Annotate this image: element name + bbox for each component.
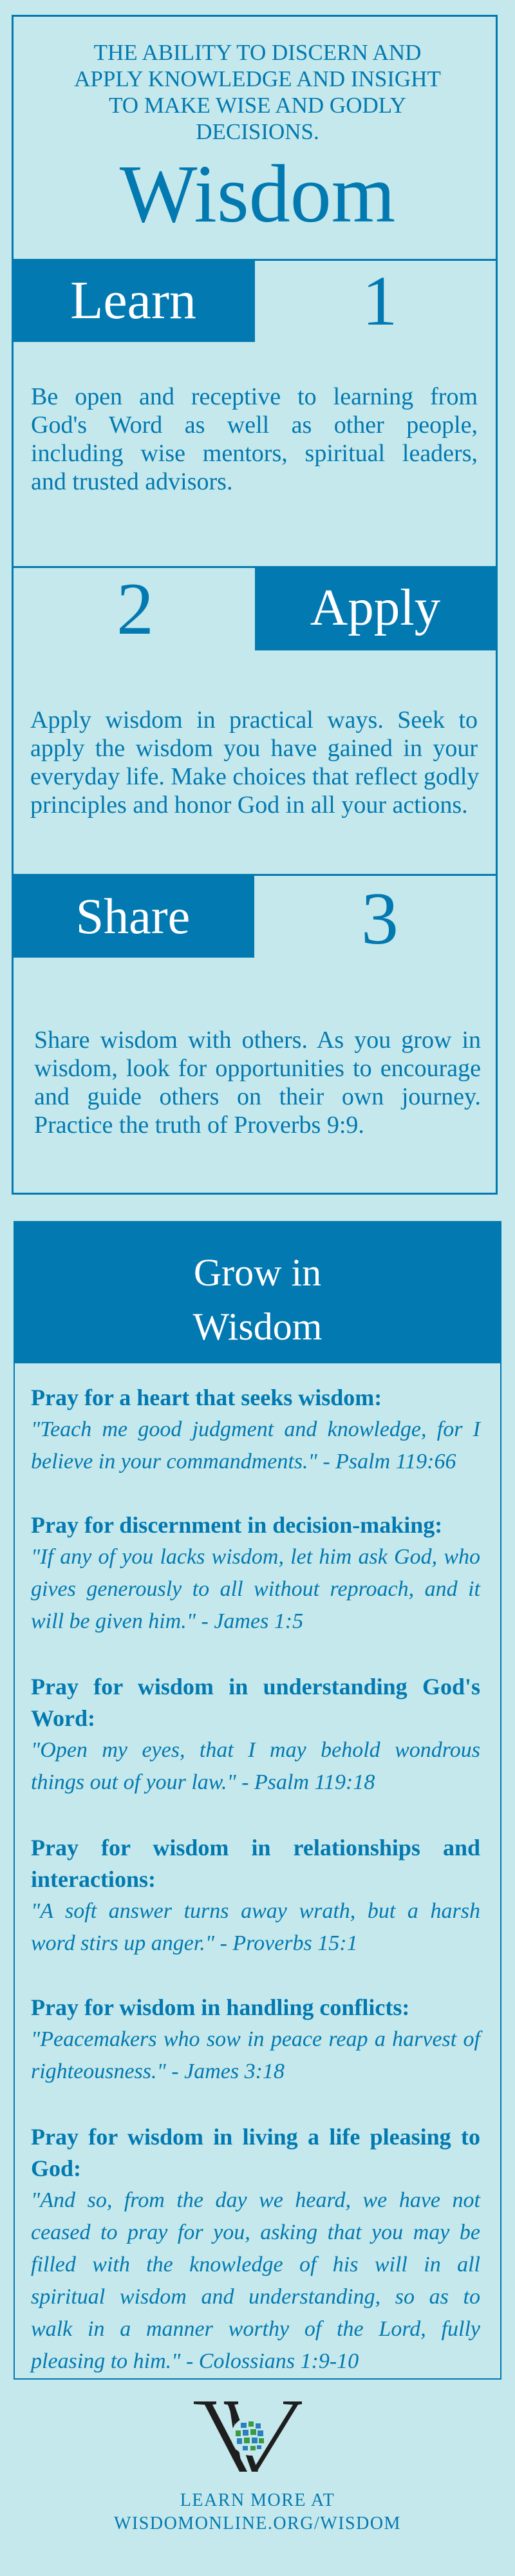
step 2 text: principles and honor God in all your actions. — [30, 791, 468, 819]
icon: logo W with globe — [194, 2401, 302, 2472]
prayer 4: word stirs up anger." - Proverbs 15:1 — [31, 1931, 358, 1955]
step 1 label box: Learn — [70, 270, 196, 330]
panel header: Grow in — [194, 1251, 321, 1294]
main frame — [12, 15, 498, 1195]
prayer 2: will be given him." - James 1:5 — [31, 1609, 303, 1633]
divider — [12, 874, 496, 876]
step 1 text: Be open and receptive to learning from — [31, 383, 478, 410]
step 2 text — [30, 706, 479, 819]
footer text: WISDOMONLINE.ORG/WISDOM — [114, 2514, 401, 2533]
prayer 3: things out of your law." - Psalm 119:18 — [31, 1770, 375, 1794]
prayer 6: walk in a manner worthy of the Lord, fully — [31, 2317, 480, 2341]
step 3 text: Practice the truth of Proverbs 9:9. — [34, 1112, 364, 1139]
step 3 text: Share wisdom with others. As you grow in — [34, 1027, 481, 1054]
step 3 text: wisdom, look for opportunities to encourage — [34, 1055, 481, 1082]
step 1 text — [31, 383, 478, 495]
subtitle: THE ABILITY TO DISCERN AND — [94, 40, 421, 65]
step 3 text — [34, 1027, 481, 1139]
step 3 text: and guide others on their own journey. — [34, 1083, 481, 1110]
step 2 text: apply the wisdom you have gained in your — [30, 735, 478, 762]
panel header — [14, 1221, 501, 1363]
title: Wisdom — [120, 148, 395, 240]
step 3 number: 3 — [361, 878, 398, 960]
step 1 text: including wise mentors, spiritual leaders, — [31, 440, 478, 467]
prayer 6: ceased to pray for you, asking that you may be — [31, 2221, 480, 2244]
prayer 5: "Peacemakers who sow in peace reap a harvest of — [31, 2027, 480, 2051]
step 1 number: 1 — [362, 261, 398, 340]
prayer 4: Pray for wisdom in relationships and — [31, 1835, 480, 1861]
footer text — [114, 2490, 401, 2533]
prayer 6: "And so, from the day we heard, we have not — [31, 2188, 480, 2212]
step 2 text: Apply wisdom in practical ways. Seek to — [30, 706, 478, 734]
step 1 text: and trusted advisors. — [31, 468, 232, 495]
subtitle: DECISIONS. — [196, 119, 319, 144]
prayer 3: "Open my eyes, that I may behold wondrous — [31, 1738, 480, 1762]
prayer 6: pleasing to him." - Colossians 1:9-10 — [31, 2349, 359, 2373]
prayer 1: believe in your commandments." - Psalm 119:66 — [31, 1450, 456, 1473]
prayer 6: spiritual wisdom and understanding, so as to — [31, 2285, 480, 2309]
prayer 5: Pray for wisdom in handling conflicts: — [31, 1994, 409, 2020]
step 2 label box: Apply — [310, 578, 440, 636]
step 1 text: God's Word as well as other people, — [31, 412, 478, 439]
prayer 4: interactions: — [31, 1866, 156, 1892]
subtitle — [74, 40, 441, 144]
step 1 label box — [12, 260, 255, 342]
prayer 6: God: — [31, 2155, 81, 2181]
prayer 4: "A soft answer turns away wrath, but a harsh — [31, 1899, 480, 1923]
prayer 6: Pray for wisdom in living a life pleasing to — [31, 2124, 480, 2150]
step 2 text: everyday life. Make choices that reflect godly — [30, 763, 479, 790]
step 3 label box: Share — [76, 888, 190, 944]
prayer 3: Word: — [31, 1705, 95, 1731]
subtitle: TO MAKE WISE AND GODLY — [109, 93, 406, 118]
prayer 2 — [31, 1512, 481, 1633]
footer text: LEARN MORE AT — [180, 2490, 335, 2510]
prayer 3 — [31, 1674, 480, 1794]
step 3 label box — [12, 875, 254, 958]
prayer 2: gives generously to all without reproach, and it — [31, 1577, 480, 1601]
panel: grow in wisdom — [14, 1221, 501, 2380]
prayer 2: "If any of you lacks wisdom, let him ask God, who — [31, 1545, 480, 1569]
prayer 6: filled with the knowledge of his will in all — [31, 2253, 480, 2277]
prayer 3: Pray for wisdom in understanding God's — [31, 1674, 480, 1700]
step 2 number: 2 — [117, 568, 154, 650]
divider — [12, 259, 496, 261]
subtitle: APPLY KNOWLEDGE AND INSIGHT — [74, 66, 441, 91]
prayer 2: Pray for discernment in decision-making: — [31, 1512, 442, 1538]
divider — [12, 566, 496, 568]
step 2 label box — [255, 567, 496, 650]
prayer 5 — [31, 1994, 483, 2083]
prayer 1: Pray for a heart that seeks wisdom: — [31, 1385, 382, 1410]
prayer 1 — [31, 1385, 482, 1473]
prayer 1: "Teach me good judgment and knowledge, for I — [31, 1417, 480, 1441]
panel header: Wisdom — [193, 1305, 322, 1348]
prayer 6 — [30, 2124, 481, 2373]
prayer 4 — [31, 1835, 480, 1955]
prayer 5: righteousness." - James 3:18 — [31, 2060, 285, 2083]
